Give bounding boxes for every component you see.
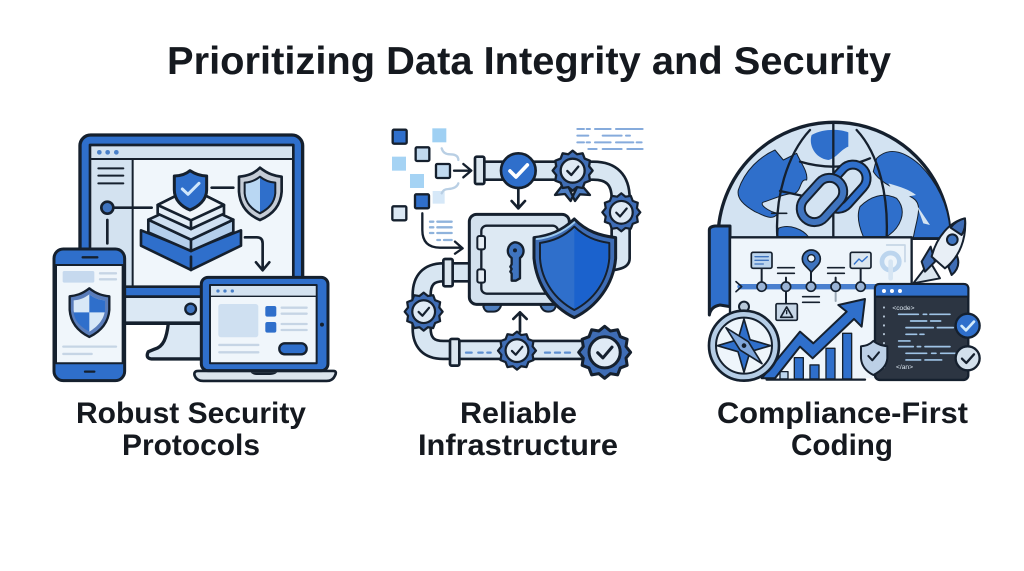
label: compliance-first coding (717, 397, 968, 462)
icon: safe (469, 214, 569, 312)
icon: globe (718, 122, 950, 238)
icon: monitor (80, 135, 303, 359)
label: compliance-first coding: Coding (791, 429, 893, 462)
gear badges (602, 193, 640, 231)
icon: chain link (795, 159, 872, 228)
icon: rocket (913, 218, 965, 283)
label: robust security protocols (76, 397, 306, 462)
icon: phone (54, 249, 125, 381)
check circle (501, 153, 536, 188)
icon: compass (709, 302, 779, 381)
panel: reliable infrastructure icon (392, 128, 643, 378)
label: reliable infrastructure: Infrastructure (418, 429, 618, 462)
label: compliance-first coding: Compliance-First (717, 397, 968, 430)
roadmap paper (730, 237, 912, 378)
panel: compliance-first coding icon (709, 122, 980, 381)
list (430, 222, 452, 240)
label: reliable infrastructure: Reliable (460, 397, 577, 430)
icon: small shield (861, 341, 887, 375)
pipeline (422, 171, 621, 350)
panel: robust security protocols icon (54, 135, 336, 381)
label: reliable infrastructure (418, 397, 618, 462)
icon: shield with check (174, 171, 207, 210)
arrows (512, 188, 527, 332)
label: robust security protocols: Robust Security (76, 397, 306, 430)
code window (875, 284, 968, 380)
code lines (577, 129, 643, 149)
icon: growth arrow (762, 299, 865, 378)
label: robust security protocols: Protocols (122, 429, 260, 462)
ribbon badge (553, 151, 593, 201)
arrow (245, 237, 269, 270)
icon: large shield (534, 219, 616, 318)
check badges (956, 314, 980, 370)
icon: layered stack (141, 188, 241, 270)
scroll roll (709, 226, 730, 315)
code window: <code> (892, 305, 915, 312)
code window: </an> (896, 364, 913, 371)
icon: growth chart bars (767, 333, 865, 380)
title: Prioritizing Data Integrity and Security (167, 40, 891, 83)
icon: split shield (212, 168, 282, 220)
icon: laptop (194, 277, 336, 381)
data squares (392, 128, 471, 254)
pipe flanges (443, 157, 484, 366)
